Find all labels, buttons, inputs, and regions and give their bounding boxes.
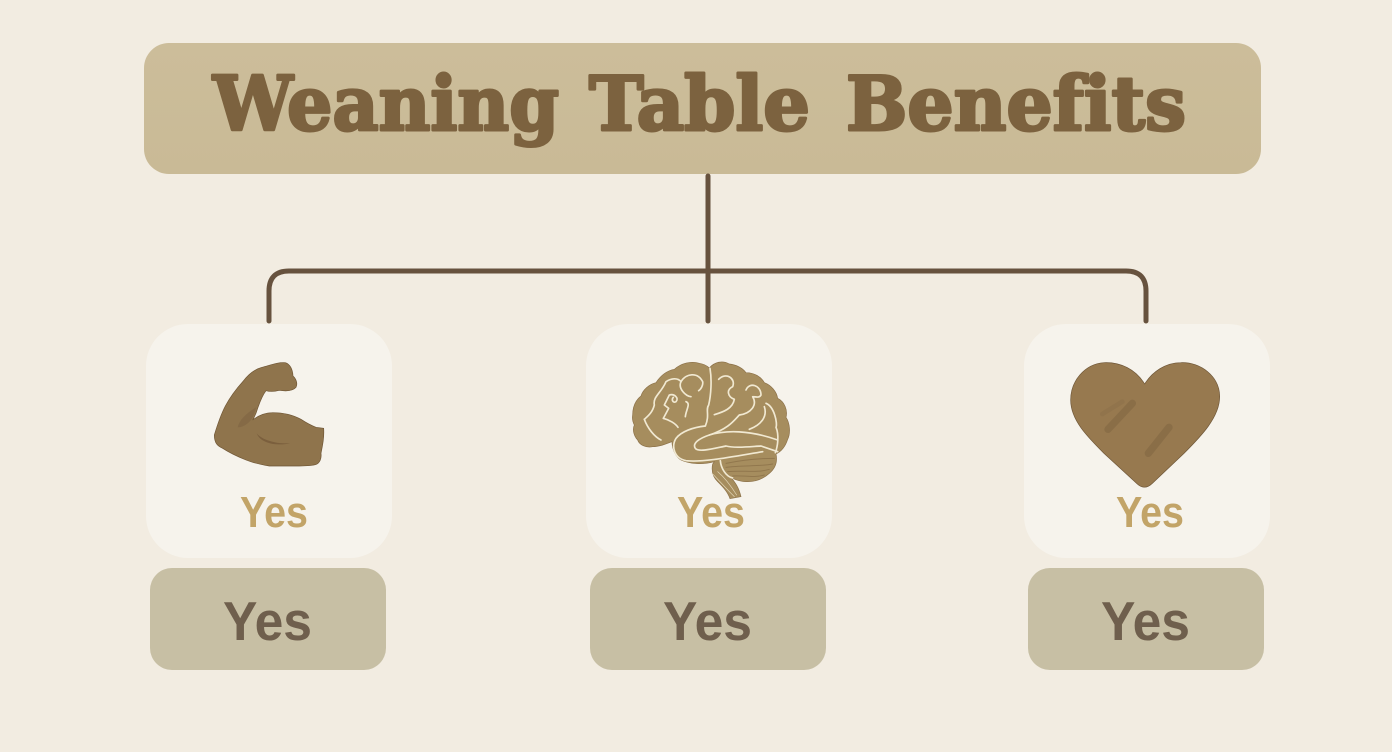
label: card yes: Yes — [1116, 488, 1184, 537]
panel: result one — [150, 568, 386, 670]
label: yes: Yes — [663, 590, 752, 652]
icon: brain — [632, 362, 790, 499]
label: yes: Yes — [1101, 590, 1190, 652]
connector tree — [269, 176, 1146, 321]
panel: muscle card — [146, 324, 392, 558]
panel: brain card — [586, 324, 832, 558]
label: card yes: Yes — [240, 488, 308, 537]
title banner — [144, 43, 1261, 174]
title: Table — [589, 60, 810, 148]
icon: heart — [1071, 363, 1220, 487]
panel: heart card — [1024, 324, 1270, 558]
title: Weaning — [212, 60, 559, 148]
panel: result two — [590, 568, 826, 670]
panel: result three — [1028, 568, 1264, 670]
icon: flexed arm — [214, 363, 324, 466]
label: card yes: Yes — [677, 488, 745, 537]
title: Benefits — [846, 60, 1186, 148]
title — [212, 60, 1186, 148]
label: yes: Yes — [223, 590, 312, 652]
